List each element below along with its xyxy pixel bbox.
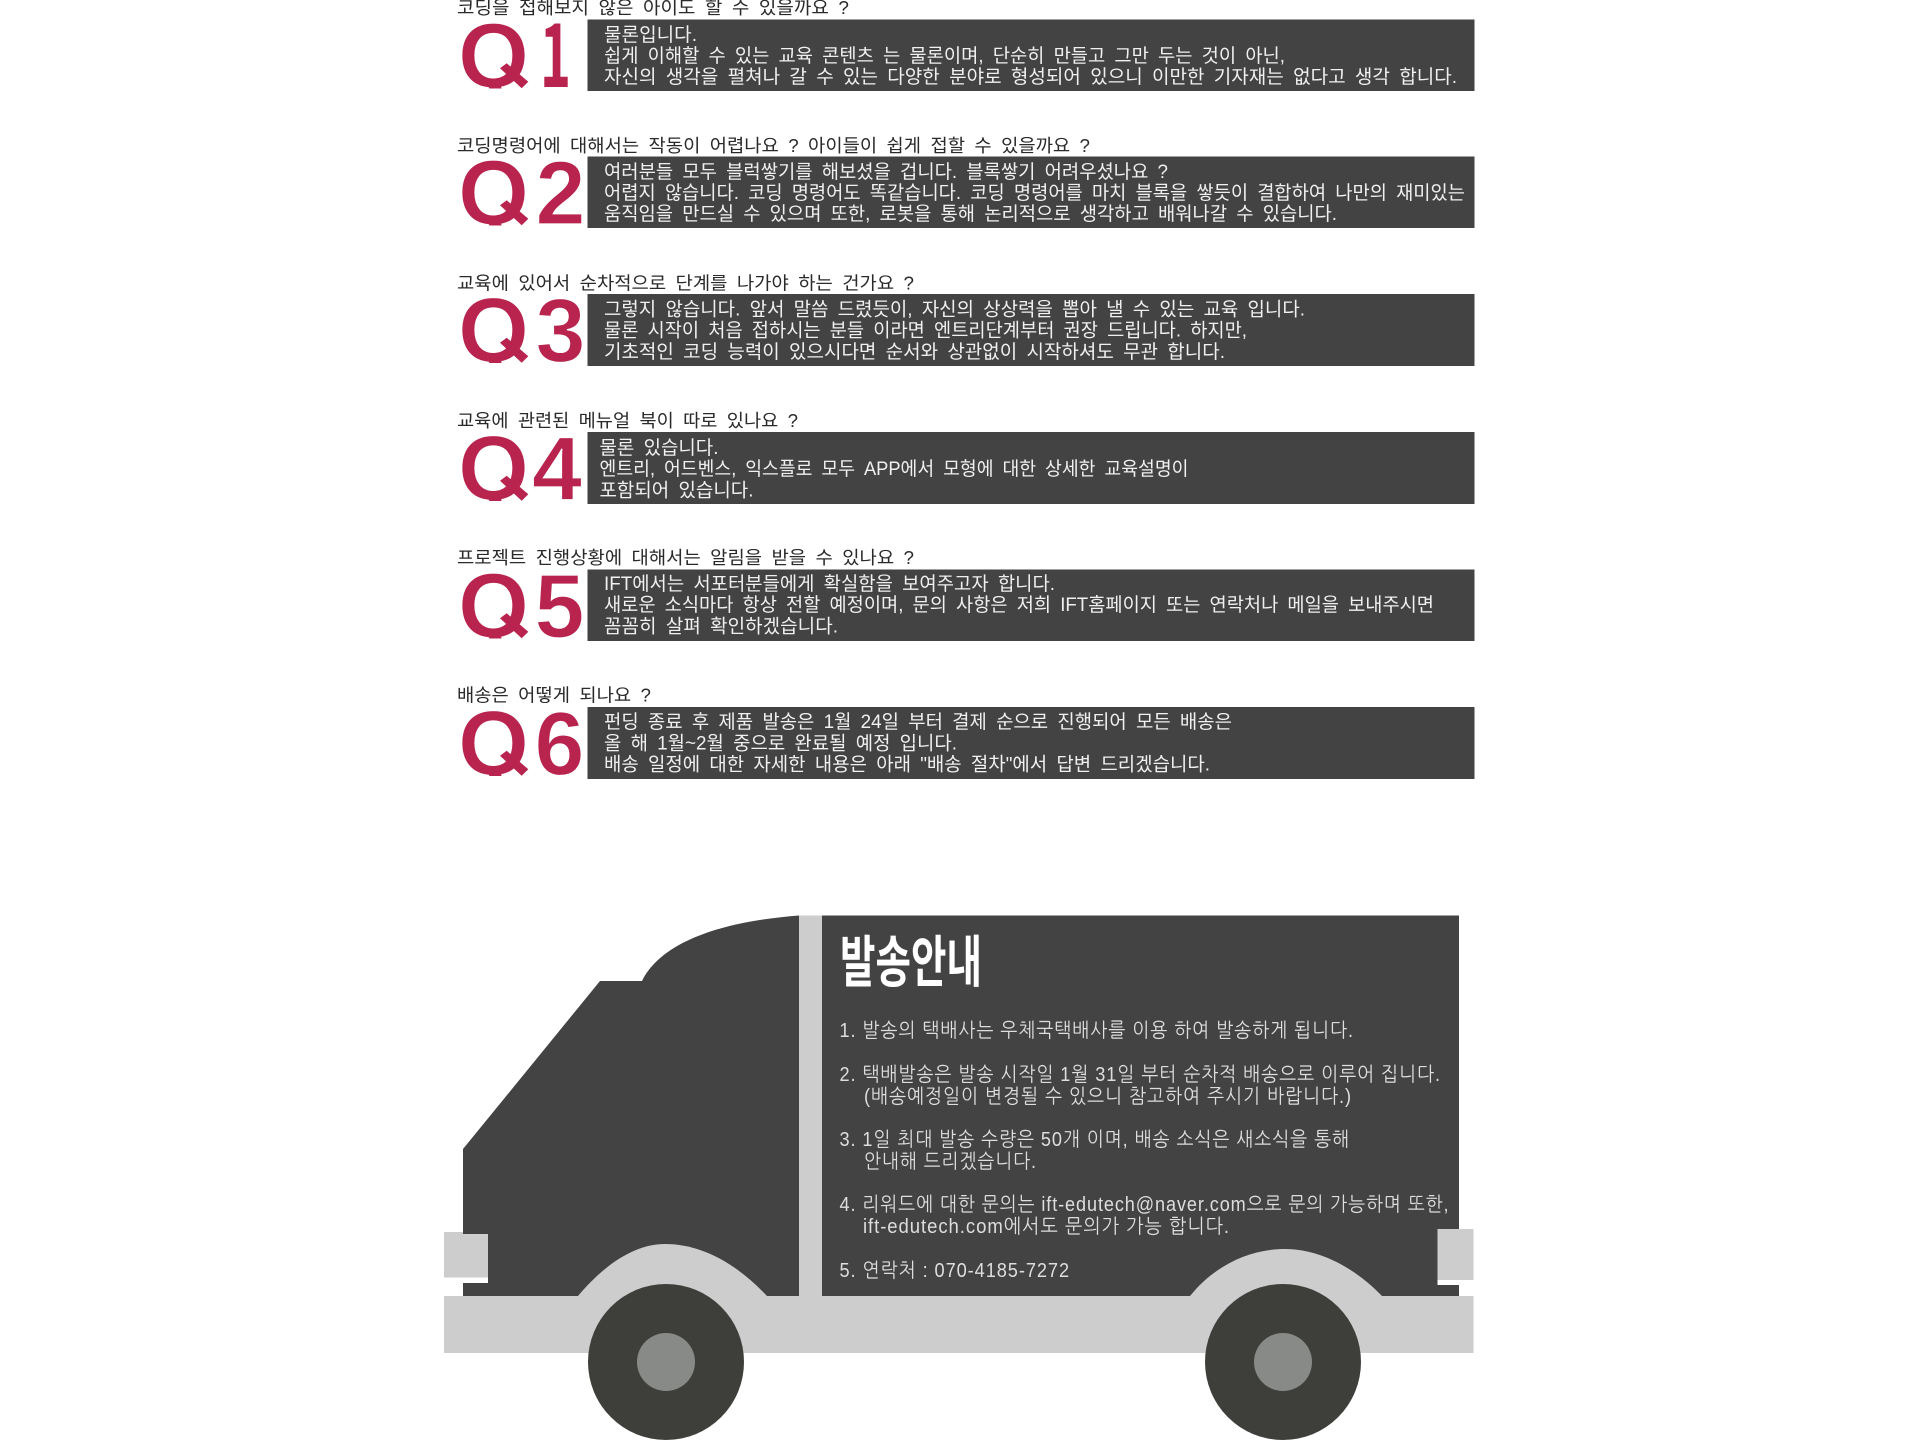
truck cab: [463, 916, 799, 1296]
Q4 badge: 4: [532, 420, 582, 520]
Q5 badge: Q: [458, 556, 529, 658]
Q4 answer box: 엔트리, 어드벤스, 익스플로 모두 APP에서 모형에 대한 상세한 교육설명이: [600, 458, 1188, 480]
Q2 badge: [462, 160, 582, 226]
Q5 answer box: IFT에서는 서포터분들에게 확실함을 보여주고자 합니다.: [604, 573, 1055, 595]
Q4 badge: [462, 436, 581, 501]
Q6 answer box: 배송 일정에 대한 자세한 내용은 아래 "배송 절차"에서 답변 드리겠습니다.: [604, 754, 1210, 776]
Q6 badge: 6: [534, 694, 584, 794]
Q3 answer box: [588, 294, 1474, 366]
truck cargo panel: [822, 916, 1459, 1296]
Q3 answer box: 물론 시작이 처음 접하시는 분들 이라면 엔트리단계부터 권장 드립니다. 하지만,: [604, 320, 1247, 342]
Q2 answer box: [588, 156, 1474, 228]
Q6 answer box: 펀딩 종료 후 제품 발송은 1월 24일 부터 결제 순으로 진행되어 모든 배송은: [604, 711, 1232, 733]
Q2 badge: 2: [536, 144, 586, 244]
shipping notice list: 5. 연락처 : 070-4185-7272: [840, 1260, 1070, 1282]
panel: Q2: [458, 136, 1474, 228]
Q5 answer box: 꼼꼼히 살펴 확인하겠습니다.: [604, 616, 838, 638]
Q6 answer box: [588, 707, 1474, 779]
front fender: [578, 1244, 767, 1296]
Q2 answer box: 여러분들 모두 블럭쌓기를 해보셨을 겁니다. 블록쌓기 어려우셨나요 ?: [604, 161, 1168, 183]
panel: Q1: [458, 0, 1474, 91]
Q5 answer box: 새로운 소식마다 항상 전할 예정이며, 문의 사항은 저희 IFT홈페이지 또는 연락처나 메일을 보내주시면: [604, 594, 1434, 616]
truck bumper and chassis: [444, 1296, 1474, 1353]
Q4 question heading: 교육에 관련된 메뉴얼 북이 따로 있나요 ?: [457, 411, 798, 431]
rear wheel: [1205, 1284, 1361, 1440]
Q1 badge: Q: [458, 6, 529, 108]
Q2 badge: Q: [458, 142, 529, 244]
Q5 answer box: [588, 570, 1474, 641]
Q4 answer box: [588, 432, 1474, 504]
Q1 answer box: 자신의 생각을 펼쳐나 갈 수 있는 다양한 분야로 형성되어 있으니 이만한 기자재는 없다고 생각 합니다.: [604, 66, 1457, 88]
rear fender: [1190, 1249, 1382, 1296]
Q5 badge: 5: [534, 557, 584, 657]
panel: Q6: [458, 686, 1474, 779]
Q1 answer box: [588, 20, 1474, 91]
Q4 answer box: 물론 있습니다.: [600, 437, 718, 459]
panel: Q4: [458, 412, 1474, 504]
Q2 answer box: 어렵지 않습니다. 코딩 명령어도 똑같습니다. 코딩 명령어를 마치 블록을 쌓듯이 결합하여 나만의 재미있는: [604, 182, 1465, 204]
shipping notice list: (배송예정일이 변경될 수 있으니 참고하여 주시기 바랍니다.): [864, 1086, 1352, 1108]
Q6 question heading: 배송은 어떻게 되나요 ?: [457, 686, 651, 706]
Q4 answer box: 포함되어 있습니다.: [600, 480, 754, 502]
Q1 badge: [462, 24, 568, 88]
rear light: [1438, 1229, 1474, 1285]
panel: Q3: [458, 274, 1474, 366]
illustration: delivery truck: [444, 916, 1474, 1440]
Q4 badge: Q: [458, 418, 529, 520]
Q3 badge: Q: [458, 280, 529, 382]
Q2 question heading: 코딩명령어에 대해서는 작동이 어렵나요 ? 아이들이 쉽게 접할 수 있을까요 ?: [457, 136, 1090, 156]
Q3 badge: [462, 298, 582, 363]
Q2 answer box: 움직임을 만드실 수 있으며 또한, 로봇을 통해 논리적으로 생각하고 배워나갈 수 있습니다.: [604, 203, 1337, 225]
Q6 badge: [462, 711, 581, 776]
shipping notice list: 3. 1일 최대 발송 수량은 50개 이며, 배송 소식은 새소식을 통해: [840, 1129, 1350, 1151]
Q6 badge: Q: [458, 693, 529, 795]
Q3 question heading: 교육에 있어서 순차적으로 단계를 나가야 하는 건가요 ?: [457, 274, 914, 294]
shipping notice list: [840, 1020, 1450, 1282]
Q3 answer box: 그렇지 않습니다. 앞서 말씀 드렸듯이, 자신의 상상력을 뽑아 낼 수 있는 교육 입니다.: [604, 298, 1305, 320]
Q1 answer box: 쉽게 이해할 수 있는 교육 콘텐츠 는 물론이며, 단순히 만들고 그만 두는 것이 아닌,: [604, 45, 1285, 67]
Q3 answer box: 기초적인 코딩 능력이 있으시다면 순서와 상관없이 시작하셔도 무관 합니다.: [604, 341, 1225, 363]
Q3 badge: 3: [536, 282, 586, 382]
shipping notice list: 안내해 드리겠습니다.: [864, 1151, 1037, 1173]
shipping notice list: 1. 발송의 택배사는 우체국택배사를 이용 하여 발송하게 됩니다.: [840, 1020, 1354, 1042]
Q5 badge: [462, 574, 582, 638]
panel: Q5: [458, 548, 1474, 641]
front wheel: [588, 1284, 744, 1440]
shipping notice list: 4. 리워드에 대한 문의는 ift-edutech@naver.com으로 문의 가능하며 또한,: [840, 1194, 1450, 1216]
Q5 question heading: 프로젝트 진행상황에 대해서는 알림을 받을 수 있나요 ?: [457, 548, 914, 568]
front light: [444, 1232, 488, 1283]
Q1 answer box: 물론입니다.: [604, 24, 697, 46]
shipping notice list: 2. 택배발송은 발송 시작일 1월 31일 부터 순차적 배송으로 이루어 집니다.: [840, 1064, 1441, 1086]
Q6 answer box: 올 해 1월~2월 중으로 완료될 예정 입니다.: [604, 732, 957, 754]
shipping notice heading: 발송안내: [840, 931, 982, 994]
shipping notice list: ift-edutech.com에서도 문의가 가능 합니다.: [863, 1216, 1230, 1238]
truck pillar: [799, 916, 822, 1296]
